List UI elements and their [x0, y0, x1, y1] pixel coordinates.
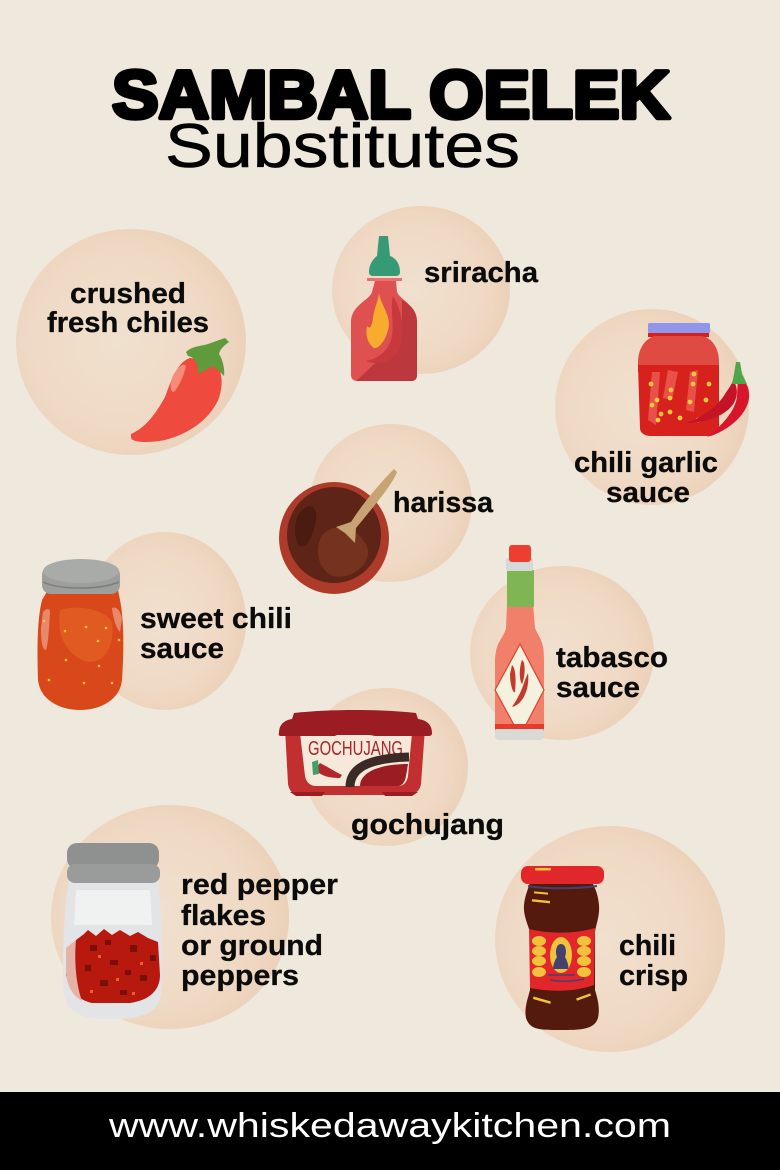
label: tabasco sauce: sauce	[556, 672, 640, 704]
label: red pepper flakes or ground peppers: red pepper	[181, 869, 338, 901]
label: red pepper flakes or ground peppers: flakes	[181, 900, 266, 932]
label: chili garlic sauce: sauce	[606, 477, 690, 509]
label: harissa: harissa	[393, 487, 494, 519]
label: chili crisp: chili	[619, 930, 676, 962]
label: chili crisp	[619, 930, 688, 992]
label: red pepper flakes or ground peppers	[181, 869, 338, 992]
label: crushed fresh chiles: fresh chiles	[47, 307, 209, 339]
footer bar	[0, 1092, 780, 1170]
panel: gochujang	[279, 688, 504, 846]
icon: sriracha bottle	[351, 236, 417, 381]
panel: red pepper flakes	[51, 805, 338, 1029]
icon: tabasco bottle	[495, 545, 544, 740]
panel: tabasco sauce	[470, 545, 668, 740]
label: sweet chili sauce: sweet chili	[140, 603, 292, 635]
label: chili crisp: crisp	[619, 960, 688, 992]
title: Substitutes	[165, 112, 520, 181]
icon: chili crisp jar	[521, 866, 604, 1030]
title: SAMBAL OELEK	[112, 57, 670, 133]
panel: harissa	[279, 424, 494, 594]
footer url: www.whiskedawaykitchen.com	[108, 1107, 671, 1145]
panel: chili crisp	[495, 826, 725, 1052]
label: tabasco sauce: tabasco	[556, 642, 668, 674]
label: crushed fresh chiles: crushed	[70, 278, 186, 310]
icon: gochujang tub	[279, 710, 432, 796]
icon: sweet chili jar	[37, 559, 123, 710]
panel: crushed fresh chiles	[16, 229, 246, 455]
label: red pepper flakes or ground peppers: or ground	[181, 930, 323, 962]
panel: sriracha	[332, 206, 539, 381]
label: crushed fresh chiles	[47, 278, 209, 339]
panel: sweet chili sauce	[37, 532, 292, 710]
label: red pepper flakes or ground peppers: peppers	[181, 960, 299, 992]
icon: chili garlic jar	[638, 323, 749, 437]
icon: harissa bowl with spoon	[279, 469, 397, 594]
label: gochujang: gochujang	[351, 809, 504, 841]
label: tabasco sauce	[556, 642, 668, 704]
icon: glass shaker of flakes	[63, 843, 163, 1019]
title	[112, 57, 670, 181]
panel: chili garlic sauce	[555, 309, 749, 509]
label: GOCHUJANG: GOCHUJANG	[308, 738, 403, 760]
label: chili garlic sauce: chili garlic	[574, 447, 718, 479]
label: sweet chili sauce: sauce	[140, 633, 224, 665]
label: sriracha: sriracha	[424, 257, 539, 289]
label: chili garlic sauce	[574, 447, 718, 509]
icon: red chili	[131, 338, 229, 442]
label: sweet chili sauce	[140, 603, 292, 665]
